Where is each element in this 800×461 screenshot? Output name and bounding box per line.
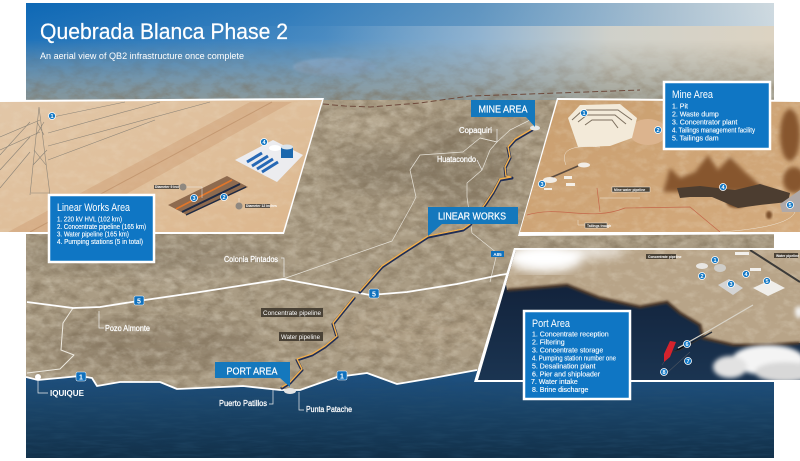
pipelines bbox=[282, 129, 532, 388]
legend box: linear works: 1. 220 kV HVL (102 km) bbox=[57, 216, 122, 224]
road network bbox=[26, 120, 530, 390]
sea bbox=[26, 370, 774, 458]
panel: linear works area bbox=[0, 98, 330, 262]
port facilities bbox=[696, 250, 800, 296]
sky bbox=[26, 3, 774, 103]
legend box: mine area: 3. Concentrator plant bbox=[672, 120, 737, 126]
callouts: Concentrate pipeline bbox=[648, 255, 682, 259]
legend box: linear works: 2. Concentrate pipeline (165 km) bbox=[57, 224, 146, 231]
legend box: port area: 7. Water intake bbox=[531, 379, 578, 386]
legend box: linear works: Linear Works Area bbox=[57, 202, 131, 214]
badges: 5 bbox=[788, 203, 792, 209]
tailings dam bbox=[780, 190, 800, 212]
border dashed line bbox=[323, 90, 640, 107]
badges: 4 bbox=[721, 185, 725, 191]
callout: water pipeline: Mine water pipeline bbox=[614, 188, 645, 192]
mountains bbox=[663, 109, 800, 193]
badges: 3 bbox=[192, 196, 196, 202]
label: Punta Patache: Punta Patache bbox=[306, 405, 352, 414]
badges: 6 bbox=[685, 342, 689, 348]
legend box: port area: 1. Concentrate reception bbox=[532, 332, 609, 338]
badges: 1 bbox=[713, 258, 717, 264]
icon: pylon and power lines bbox=[0, 102, 210, 195]
legend box: port area: 4. Pumping station number one bbox=[532, 356, 616, 362]
panel: port area bbox=[470, 244, 800, 399]
callouts: trench dimensions: Diameter 12 inches bbox=[246, 204, 277, 208]
callouts: Water pipeline bbox=[776, 254, 799, 258]
callout: tailings: Tailings trough bbox=[587, 224, 611, 228]
highway shields bbox=[76, 251, 504, 382]
legend box: linear works: 3. Water pipeline (165 km) bbox=[57, 232, 129, 238]
site marker: Iquique bbox=[35, 374, 41, 380]
mound bbox=[724, 202, 746, 210]
legend box: port area bbox=[524, 311, 630, 399]
badges: 4 bbox=[262, 140, 266, 146]
callout: concentrate pipeline: Concentrate pipeline bbox=[263, 310, 321, 317]
badges: 4 bbox=[744, 272, 748, 278]
panel: mine area bbox=[515, 82, 800, 238]
title: Quebrada Blanca Phase 2 bbox=[40, 19, 288, 44]
shield: route 5 centre bbox=[369, 289, 379, 298]
site marker: port bbox=[284, 388, 296, 394]
legend box: port area: 2. Filtering bbox=[532, 340, 565, 346]
badges bbox=[538, 110, 794, 209]
badges: 3 bbox=[729, 282, 733, 288]
icon: pier and ship bbox=[662, 305, 753, 372]
tailings facility bbox=[677, 184, 790, 208]
label: Copaquiri: Copaquiri bbox=[459, 126, 492, 135]
icon: pumping station bbox=[235, 140, 303, 182]
cloud: lower right bbox=[713, 306, 800, 382]
label: Iquique: IQUIQUE bbox=[50, 388, 84, 398]
badges: 3 bbox=[540, 182, 544, 188]
area flag: linear works bbox=[428, 207, 518, 236]
badges: 2 bbox=[222, 195, 226, 201]
label: Pozo Almonte: Pozo Almonte bbox=[105, 324, 150, 333]
shield: A85: A85 bbox=[493, 252, 502, 257]
subtitle: An aerial view of QB2 infrastructure once complete bbox=[40, 51, 244, 61]
badges: 1 bbox=[50, 114, 54, 120]
icon: pipeline trench bbox=[168, 176, 248, 215]
badges: 2 bbox=[656, 128, 660, 134]
legend box: port area: 5. Desalination plant bbox=[532, 364, 595, 370]
area flag: mine area bbox=[471, 100, 535, 127]
legend box: port area: Port Area bbox=[532, 318, 571, 330]
shield: route 1 west bbox=[76, 372, 86, 382]
badges: 7 bbox=[686, 359, 690, 365]
distant terrain bbox=[26, 45, 774, 100]
hazy plain beyond the horizon bbox=[328, 26, 774, 100]
concentrator plant bbox=[543, 162, 590, 190]
lagoon bbox=[293, 58, 362, 74]
internal roads bbox=[527, 188, 720, 232]
legend box: mine area: 2. Waste dump bbox=[672, 112, 719, 118]
legend box: mine area: 5. Tailings dam bbox=[672, 136, 719, 142]
badges bbox=[660, 256, 770, 376]
legend box: linear works: 4. Pumping stations (5 in total) bbox=[57, 239, 143, 246]
place labels bbox=[38, 126, 497, 414]
coast rim bbox=[507, 285, 800, 345]
legend box: linear works bbox=[49, 195, 154, 262]
coast land bbox=[500, 250, 800, 350]
legend box: mine area bbox=[664, 82, 770, 149]
legend box: port area: 6. Pier and shiploader bbox=[532, 372, 601, 378]
callouts: trench dimensions: Diameter 9 inches bbox=[155, 185, 184, 189]
label: Puerto Patillos: Puerto Patillos bbox=[219, 399, 267, 408]
area flag: port area: PORT AREA bbox=[226, 366, 278, 378]
waste dump bbox=[632, 119, 663, 145]
area flag: linear works: LINEAR WORKS bbox=[438, 210, 506, 222]
badges: 2 bbox=[700, 274, 704, 280]
legend box: port area: 8. Brine discharge bbox=[532, 387, 589, 394]
badges: 1 bbox=[582, 111, 586, 117]
legend box: mine area: 1. Pit bbox=[672, 104, 688, 110]
main terrain bbox=[26, 100, 774, 395]
badges bbox=[48, 112, 268, 202]
shield: route 1 east: 1 bbox=[340, 374, 344, 380]
label: Huatacondo: Huatacondo bbox=[437, 155, 476, 164]
shield: route 5 west bbox=[134, 296, 144, 306]
legend box: mine area: 4. Tailings management facility bbox=[672, 128, 755, 134]
site marker: mine bbox=[530, 126, 540, 130]
callout: water pipeline bbox=[612, 187, 650, 192]
badges: 5 bbox=[765, 279, 769, 285]
callout: water pipeline: Water pipeline bbox=[281, 334, 320, 341]
sand track bbox=[8, 102, 292, 232]
area flag: mine area: MINE AREA bbox=[478, 104, 528, 116]
shield: route 5 west: 5 bbox=[137, 298, 141, 306]
pipeline callouts bbox=[261, 308, 323, 341]
shield: route 1 west: 1 bbox=[79, 374, 83, 382]
label: Colonia Pintados: Colonia Pintados bbox=[224, 255, 278, 264]
callouts: trench dimensions bbox=[154, 184, 277, 210]
area flag: port area bbox=[215, 362, 290, 387]
legend box: mine area: Mine Area bbox=[672, 89, 714, 101]
shield: route 5 centre: 5 bbox=[372, 292, 376, 298]
shield: route 1 east bbox=[337, 371, 347, 380]
shield: A85 bbox=[491, 251, 504, 257]
legend box: port area: 3. Concentrate storage bbox=[532, 348, 603, 354]
callouts bbox=[646, 253, 799, 259]
pit bbox=[568, 104, 637, 147]
cloud: upper left bbox=[510, 250, 628, 275]
badges: 8 bbox=[662, 370, 666, 376]
